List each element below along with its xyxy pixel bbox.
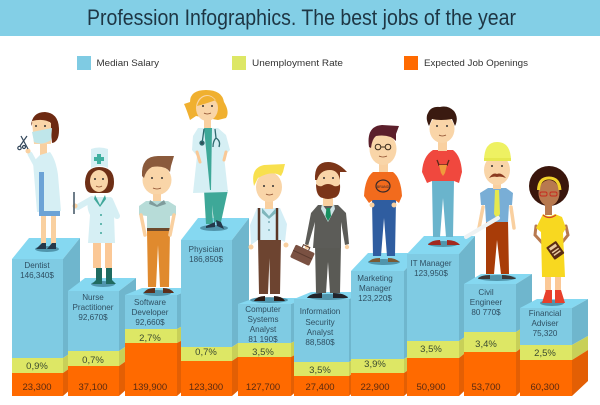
legend: unemployment rate (232, 56, 343, 70)
bar: Marketing Manager: 22,900 (360, 382, 390, 393)
bar: Physician (181, 218, 249, 396)
bar: Marketing Manager: Manager (359, 284, 391, 293)
legend (77, 56, 528, 70)
bar: Information Security Analyst: Information (300, 307, 340, 316)
character: nurse (72, 148, 117, 287)
icon: scissors (18, 136, 28, 150)
legend: median salary: Median Salary (96, 58, 159, 69)
bar: Dentist: 0,9% (26, 361, 48, 372)
bar: Information Security Analyst: 88,580$ (305, 338, 335, 347)
character: information security analyst (290, 162, 349, 300)
character: financial adviser (529, 166, 569, 306)
bar: Computer Systems Analyst: 127,700 (246, 382, 280, 393)
bar: Software Developer: Developer (132, 308, 169, 317)
character: computer systems analyst (248, 164, 288, 303)
character: marketing manager: BRAND (377, 185, 390, 189)
bar: Software Developer: 92,660$ (135, 318, 165, 327)
character: physician (184, 90, 230, 231)
icon: stethoscope (200, 129, 220, 147)
bar: Nurse Practitioner: 92,670$ (78, 313, 108, 322)
character: civil engineer (466, 142, 516, 281)
bar: Civil Engineer: 80 770$ (471, 308, 501, 317)
bar: Dentist: 23,300 (22, 382, 52, 393)
bar: Marketing Manager (351, 253, 421, 396)
bar: Nurse Practitioner: Nurse (82, 293, 104, 302)
bar: Software Developer: 2,7% (139, 333, 161, 344)
bar: Physician: 186,850$ (189, 255, 223, 264)
bar: Dentist (12, 238, 80, 396)
bar: IT Manager: IT Manager (410, 259, 452, 268)
bar: Civil Engineer: 53,700 (471, 382, 501, 393)
bar: Financial Adviser: Adviser (532, 319, 559, 328)
bar: Computer Systems Analyst: 81 190$ (248, 335, 278, 344)
icon: briefcase (290, 242, 316, 266)
bar: IT Manager: 3,5% (420, 344, 442, 355)
bar: Software Developer (125, 288, 194, 396)
bar: Software Developer: 139,900 (133, 382, 167, 393)
bar: Civil Engineer: 3,4% (475, 339, 497, 350)
legend: median salary (77, 56, 159, 70)
bar: Computer Systems Analyst: Analyst (250, 325, 277, 334)
bar: Marketing Manager: Marketing (357, 274, 393, 283)
bar: Marketing Manager: 3,9% (364, 359, 386, 370)
bar: Financial Adviser: 60,300 (530, 382, 560, 393)
bar: Information Security Analyst: 27,400 (305, 382, 335, 393)
bar: Civil Engineer: Engineer (470, 298, 503, 307)
bar: Dentist: 146,340$ (20, 271, 54, 280)
character: software developer (139, 156, 176, 296)
bar: Nurse Practitioner: 37,100 (78, 382, 108, 393)
character: IT manager (422, 106, 462, 247)
header band with title: Profession Infographics. The best jobs of the year (87, 5, 516, 30)
bar: Financial Adviser: Financial (529, 309, 561, 318)
bar: Computer Systems Analyst: Computer (245, 305, 281, 314)
header band with title (0, 0, 600, 36)
bar: Information Security Analyst (294, 292, 366, 396)
icon: rolled blueprint (466, 218, 498, 237)
bar: Computer Systems Analyst: 3,5% (252, 347, 274, 358)
bar: Financial Adviser (520, 299, 588, 396)
bar: Nurse Practitioner: 0,7% (82, 355, 104, 366)
bar: IT Manager (407, 236, 475, 396)
bar: Nurse Practitioner (68, 278, 136, 396)
legend: expected job openings (404, 56, 528, 70)
bar: IT Manager: 123,950$ (414, 269, 448, 278)
legend: expected job openings: Expected Job Openings (424, 58, 528, 69)
bar: IT Manager: 50,900 (416, 382, 446, 393)
bar: Dentist: Dentist (24, 261, 50, 270)
character: dentist (18, 112, 61, 252)
bar: Financial Adviser: 75,320 (533, 329, 558, 338)
bar: Financial Adviser: 2,5% (534, 348, 556, 359)
bar: Information Security Analyst: Analyst (307, 328, 334, 337)
bar: Computer Systems Analyst: Systems (247, 315, 279, 324)
bar: Software Developer: Software (134, 298, 166, 307)
bar: Physician: 123,300 (189, 382, 223, 393)
bar: Physician: Physician (189, 245, 223, 254)
bar: Information Security Analyst: 3,5% (309, 365, 331, 376)
bar: Marketing Manager: 123,220$ (358, 294, 392, 303)
icon: syringe (73, 192, 75, 214)
bar: Civil Engineer: Civil (478, 288, 494, 297)
bar: Nurse Practitioner: Practitioner (73, 303, 114, 312)
icon: calculator (546, 241, 565, 260)
bar: Computer Systems Analyst (238, 298, 308, 396)
legend: unemployment rate: Unemployment Rate (252, 58, 343, 69)
character: marketing manager (364, 125, 402, 265)
bar: Physician: 0,7% (195, 347, 217, 358)
bar: Information Security Analyst: Security (305, 318, 336, 327)
bar: Civil Engineer (464, 274, 532, 396)
